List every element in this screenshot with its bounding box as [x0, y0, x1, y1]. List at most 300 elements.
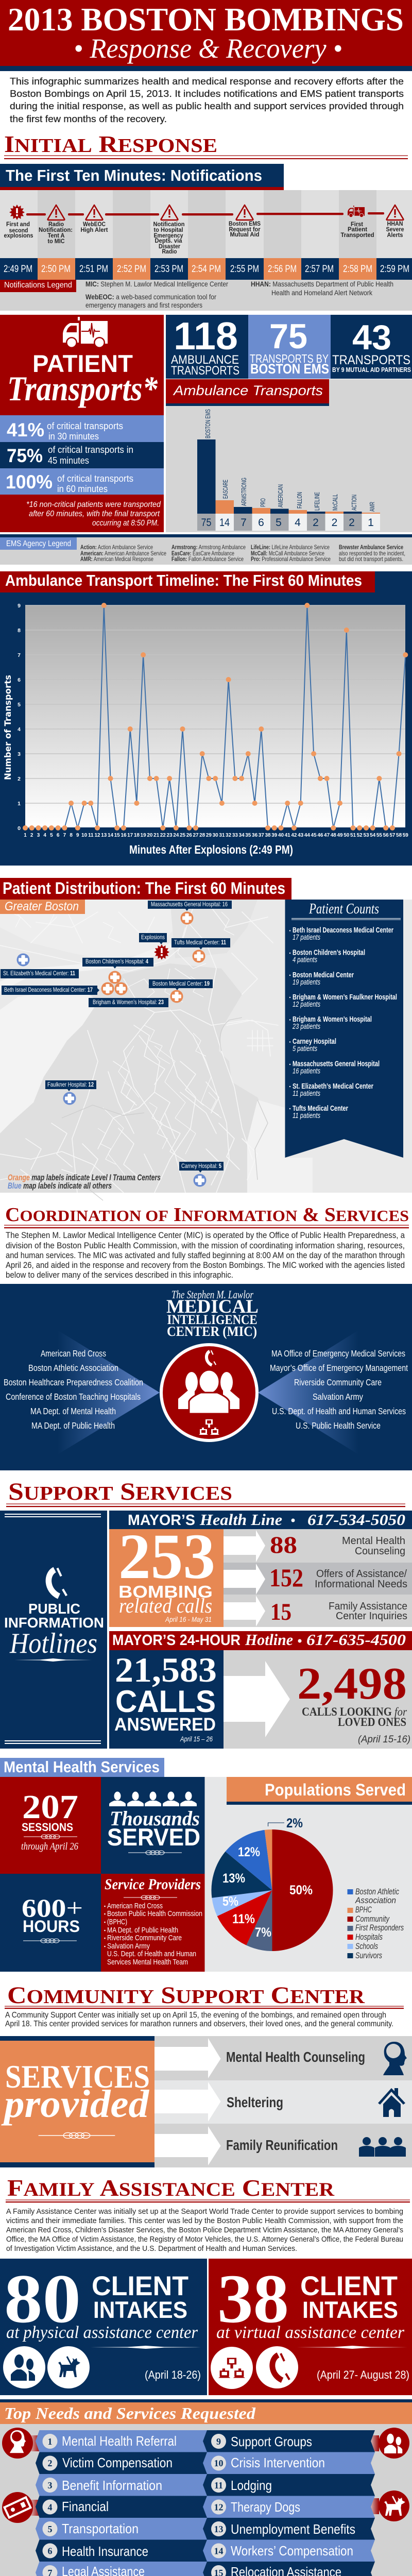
timeline event labels: Transported: [341, 232, 374, 239]
panel: service providers: Riverside Community Care: [107, 1934, 182, 1942]
left agencies list: Boston Healthcare Preparedness Coalition: [4, 1377, 143, 1387]
count: tufts: 11 patients: [293, 1112, 320, 1120]
bar labels: AMERICAN: [277, 484, 284, 507]
stat: 207 sessions: 207: [22, 1788, 78, 1826]
x axis labels: 42: [291, 833, 297, 838]
need 3: Benefit Information: [62, 2478, 162, 2493]
need 5: Transportation: [62, 2521, 139, 2536]
panel: physical assistance center: INTAKES: [93, 2297, 187, 2323]
count: carney: 5 patients: [293, 1045, 317, 1053]
x axis labels: 4: [43, 833, 46, 838]
pie legend: Survivors: [355, 1951, 382, 1960]
service: sheltering: [154, 2082, 405, 2122]
panel: ambulance transport timeline chart: [0, 571, 412, 866]
EMS agency legend: AMR: American Medical Response: [80, 555, 153, 563]
x axis labels: 19: [141, 833, 146, 838]
x axis labels: 23: [167, 833, 173, 838]
map marker: brigham and women's: Brigham & Women’s Hospital: 23: [93, 998, 164, 1006]
row: 15 family inquiries: Center Inquiries: [336, 1611, 407, 1622]
x axis labels: 26: [186, 833, 192, 838]
service: family reunification: Family Reunification: [226, 2137, 338, 2153]
hotline header: 617-635-4500: [306, 1631, 406, 1649]
timeline event labels: [4, 221, 404, 255]
x axis labels: 43: [298, 833, 304, 838]
EMS agency legend: Pro: Professional Ambulance Service: [251, 555, 331, 563]
subtitle: • Response & Recovery •: [74, 33, 342, 64]
stat: 43 mutual aid: 43: [352, 318, 391, 357]
left needs ribbon: [36, 2430, 207, 2576]
need 2: [36, 2452, 207, 2474]
need 11: 11: [214, 2480, 223, 2490]
need 1: 1: [47, 2436, 53, 2447]
stat: 75 percent: of critical transports in: [48, 445, 133, 455]
need 5: [36, 2518, 207, 2540]
need 14: Workers’ Compensation: [231, 2543, 353, 2558]
pie legend: [347, 1887, 404, 1960]
count: st elizabeth: St. Elizabeth’s Medical Center: [293, 1082, 373, 1091]
panel: transport totals: [166, 314, 412, 379]
stat: 253 bombing related calls: BOMBING: [118, 1582, 213, 1601]
need 2: 2: [47, 2458, 53, 2468]
x axis labels: [24, 833, 408, 838]
x axis labels: 46: [317, 833, 323, 838]
patient transports heading: PATIENT: [32, 350, 133, 377]
need 4: Financial: [62, 2499, 109, 2514]
icon: head: [2, 2428, 33, 2459]
stat: 75 boston ems: TRANSPORTS BY: [250, 352, 329, 365]
row: 88 counseling: Counseling: [355, 1546, 405, 1557]
intro text: [10, 76, 404, 124]
panel: service providers: Boston Public Health Commission: [107, 1909, 202, 1918]
map marker: faulkner: Faulkner Hospital: 12: [47, 1081, 94, 1088]
x axis labels: 7: [63, 833, 66, 838]
pie legend: Community: [355, 1914, 390, 1924]
panel: virtual assistance center: INTAKES: [302, 2297, 398, 2323]
panel: service providers: [101, 1874, 205, 1972]
stat: 253 bombing related calls: related calls: [119, 1594, 212, 1617]
stat: 100 percent: 100%: [6, 471, 53, 493]
y axis labels: 4: [18, 726, 21, 733]
count: boston children's: Boston Children’s Hospital: [293, 948, 365, 957]
x axis labels: 25: [180, 833, 185, 838]
stat: 21,583 calls answered: CALLS: [115, 1684, 216, 1719]
health line header: MAYOR’S: [128, 1512, 195, 1529]
count: tufts: [289, 1104, 348, 1120]
need 6: Health Insurance: [62, 2544, 148, 2559]
x axis labels: 48: [331, 833, 336, 838]
chart heading: Ambulance Transports: [173, 383, 323, 398]
title: 2013 BOSTON BOMBINGS: [8, 1, 404, 38]
bar labels: AMR: [368, 502, 376, 512]
x axis labels: 5: [50, 833, 53, 838]
x axis labels: 6: [57, 833, 60, 838]
bar values: [197, 514, 380, 531]
bar labels: McCALL: [331, 494, 339, 511]
map marker: beth israel: Beth Israel Deaconess Medical Center: 17: [4, 986, 93, 993]
left agencies list: Boston Athletic Association: [28, 1363, 118, 1373]
y axis labels: 7: [18, 652, 21, 658]
count: brigham: 23 patients: [292, 1023, 320, 1031]
stat: 207 sessions: through April 26: [21, 1841, 78, 1852]
needs heading: Top Needs and Services Requested: [4, 2404, 256, 2422]
x axis labels: 37: [259, 833, 264, 838]
bar labels: ARMSTRONG: [240, 478, 248, 506]
timeline event labels: Radio: [162, 249, 177, 255]
MIC heading: INTELLIGENCE: [167, 1312, 258, 1327]
need 4: [36, 2496, 207, 2518]
stat: 21,583 calls answered: 21,583: [115, 1650, 217, 1689]
bar values: 2: [332, 517, 337, 529]
count: boston medical center: [289, 971, 354, 987]
stat: 118 ambulance transports: 118: [174, 314, 238, 358]
EMS agency legend: Fallon: Fallon Ambulance Service: [171, 555, 244, 563]
x axis labels: 57: [389, 833, 396, 838]
EMS agency legend: Action: Action Ambulance Service: [80, 544, 153, 551]
map marker: massachusetts general: [148, 901, 232, 924]
timeline clock cells: 2:55 PM: [230, 264, 259, 275]
x axis labels: 53: [363, 833, 369, 838]
x axis labels: 28: [199, 833, 205, 838]
health line header: [128, 1511, 405, 1529]
notifications legend: [0, 280, 412, 311]
panel: services provided: SERVICES: [5, 2059, 150, 2095]
band heading: The First Ten Minutes: Notifications: [6, 166, 262, 184]
icon connectors: [31, 2435, 379, 2576]
stat: 100 percent: of critical transports: [57, 473, 133, 484]
pie chart: 13%: [222, 1871, 245, 1886]
arrow: family assistance: [224, 1596, 265, 1626]
stat: 253 bombing related calls: April 16 - May 31: [165, 1615, 212, 1623]
count: st elizabeth: [289, 1082, 373, 1098]
need 1: [36, 2430, 207, 2452]
timeline event labels: Notification:: [39, 227, 73, 233]
health line header: Health Line: [199, 1511, 282, 1529]
x axis labels: 33: [232, 833, 238, 838]
timeline event labels: Tent A: [47, 233, 65, 239]
pie legend: Schools: [355, 1941, 378, 1951]
timeline event labels: to MIC: [47, 239, 65, 245]
notifications legend: WebEOC: a web-based communication tool for: [85, 293, 216, 301]
x axis labels: 29: [206, 833, 212, 838]
x axis labels: 3: [37, 833, 40, 838]
row: 88 counseling: Mental Health: [342, 1535, 405, 1547]
right agencies list: Riverside Community Care: [294, 1377, 382, 1387]
section heading: family assistance center: FAMILY ASSISTANCE CENTER: [7, 2175, 335, 2201]
hotline header: [112, 1631, 406, 1649]
x axis labels: 38: [265, 833, 271, 838]
timeline clock cells: 2:52 PM: [117, 264, 146, 275]
left agencies list: Conference of Boston Teaching Hospitals: [6, 1392, 141, 1402]
title banner: [0, 0, 412, 71]
icon: people row: [109, 1792, 197, 1806]
map marker: boston children's: [82, 958, 153, 984]
footnote: after 60 minutes, with the final transport: [29, 510, 160, 518]
panel: service providers: Service Providers: [105, 1876, 201, 1893]
hotlines heading: INFORMATION: [4, 1615, 104, 1631]
plot area: [25, 605, 405, 828]
icon: money: [2, 2492, 33, 2523]
section heading: initial response: INITIAL RESPONSE: [4, 131, 217, 157]
panel: service providers: MA Dept. of Public Health: [107, 1926, 178, 1935]
call breakdown rows: [224, 1529, 412, 1627]
panel: top needs and services requested: [0, 2399, 412, 2576]
x axis labels: 21: [153, 833, 160, 838]
pie chart: 12%: [238, 1845, 260, 1859]
x axis labels: 45: [311, 833, 317, 838]
count: brigham: [289, 1015, 372, 1031]
x axis labels: 40: [278, 833, 284, 838]
row: 152 offers: Offers of Assistance/: [316, 1568, 407, 1580]
bar labels: EASCARE: [221, 480, 229, 499]
timeline clock cells: 2:49 PM: [4, 264, 32, 275]
map marker: massachusetts general: Massachusetts General Hospital: 16: [151, 901, 228, 908]
panel: service providers: American Red Cross: [107, 1902, 163, 1910]
stat: 43 mutual aid: [332, 318, 411, 374]
bars: [197, 439, 380, 514]
x axis labels: 24: [173, 833, 179, 838]
x axis labels: 47: [324, 833, 330, 838]
count: faulkner: [289, 993, 397, 1009]
stat: 100 percent: in 60 minutes: [57, 484, 108, 494]
panel: virtual assistance center: 38: [217, 2261, 289, 2337]
x axis title: Minutes After Explosions (2:49 PM): [129, 843, 293, 856]
section heading: community support center: COMMUNITY SUPPORT CENTER: [7, 1982, 365, 2009]
stat: 100 percent: [0, 468, 164, 495]
x axis labels: 13: [101, 833, 107, 838]
count: brigham: Brigham & Women’s Hospital: [293, 1015, 372, 1024]
count: beth israel: 17 patients: [293, 934, 320, 942]
count: tufts: Tufts Medical Center: [293, 1104, 348, 1113]
bar values: 75: [201, 517, 211, 529]
hotline header: Hotline: [245, 1631, 293, 1649]
x axis labels: 56: [383, 833, 389, 838]
panel: services provided: provided: [1, 2082, 149, 2126]
y axis labels: [18, 603, 21, 832]
family assistance paragraph: [6, 2207, 403, 2253]
bar labels: [204, 409, 376, 512]
timeline clock cells: [0, 258, 412, 280]
stat: 253 bombing related calls: 253: [118, 1521, 215, 1592]
left agencies list: [4, 1348, 143, 1431]
map marker: explosions: [139, 933, 169, 960]
panel: patient counts: [285, 900, 403, 1158]
timeline event labels: Patient: [348, 227, 367, 233]
need 10: 10: [214, 2458, 224, 2468]
x axis labels: 52: [357, 833, 363, 838]
stat: thousands served: Thousands: [110, 1807, 200, 1830]
family assistance paragraph: A Family Assistance Center was initially set up at the Seaport World Trade Center to provide support services to bombing: [6, 2207, 403, 2216]
bar values: 14: [219, 517, 230, 529]
panel: mayor's health line: [109, 1511, 412, 1627]
panel: ambulance transports bar chart: [166, 379, 412, 532]
timeline clock cells: 2:54 PM: [192, 264, 221, 275]
map marker: explosions: Explosions: [141, 934, 165, 941]
right needs ribbon: [203, 2430, 375, 2576]
section heading: coordination: COORDINATION OF INFORMATION & SERVICES: [5, 1204, 409, 1226]
row: 152 offers: Informational Needs: [315, 1579, 407, 1590]
need 7: [36, 2562, 207, 2576]
need 1: Mental Health Referral: [62, 2433, 177, 2449]
panel: physical assistance center: at physical assistance center: [6, 2323, 198, 2342]
stat: 75 percent: [0, 442, 164, 468]
intro text: the first few months of the recovery.: [10, 113, 167, 124]
x axis labels: 12: [94, 833, 100, 838]
x axis labels: 18: [134, 833, 140, 838]
panel: virtual assistance center: CLIENT: [300, 2271, 398, 2301]
chart heading: Ambulance Transport Timeline: The First 60 Minutes: [5, 571, 362, 589]
intro text: This infographic summarizes health and medical response and recovery efforts after the: [10, 76, 404, 87]
notifications timeline panel: [0, 164, 412, 280]
stat: 21,583 calls answered: ANSWERED: [114, 1715, 216, 1735]
bar labels: LIFELINE: [313, 492, 321, 511]
map marker: beth israel: [2, 982, 114, 995]
bar values: 2: [313, 517, 319, 529]
icon: MIC emblem: [160, 1343, 259, 1442]
arrow: mental health: [224, 1530, 265, 1562]
y axis labels: 9: [18, 603, 21, 609]
stat: 2,498 calls looking for loved ones: 2,498: [297, 1659, 407, 1709]
timeline event labels: Notification: [153, 222, 184, 228]
footnote: [0, 495, 164, 532]
need 13: [203, 2518, 375, 2540]
timeline event labels: High Alert: [80, 227, 108, 233]
stat: thousands served: SERVED: [107, 1823, 200, 1851]
x axis labels: 22: [160, 833, 166, 838]
y axis labels: 0: [18, 825, 21, 832]
need 14: [203, 2540, 375, 2562]
timeline event labels: Boston EMS: [229, 221, 261, 227]
pie legend: Boston Athletic: [355, 1887, 399, 1896]
count: mass general: 16 patients: [293, 1067, 320, 1076]
panel: service providers: Salvation Army: [107, 1942, 150, 1951]
timeline event labels: WebEOC: [83, 222, 106, 228]
timeline event labels: Radio: [48, 222, 64, 228]
map marker: brigham and women's: [89, 982, 168, 1007]
service: mental health counseling: [154, 2038, 407, 2078]
x axis labels: 14: [108, 833, 113, 838]
x axis labels: 34: [239, 833, 245, 838]
count: boston children's: [289, 948, 365, 964]
timeline clock cells: 2:51 PM: [79, 264, 108, 275]
notifications legend: MIC: Stephen M. Lawlor Medical Intelligence Center: [85, 280, 228, 288]
need 11: Lodging: [231, 2478, 272, 2493]
x axis labels: 11: [88, 833, 94, 838]
stat: 2,498 calls looking for loved ones: [224, 1650, 412, 1749]
service: family reunification: [154, 2126, 406, 2165]
map legend: Blue map labels indicate all others: [8, 1181, 112, 1191]
x axis labels: 36: [252, 833, 258, 838]
row: 88 counseling: [270, 1532, 405, 1558]
family assistance paragraph: victims and their immediate families. This center was led by the Boston Public Health Commission, with support from the: [6, 2216, 403, 2225]
coordination paragraph: [6, 1231, 405, 1280]
heading: patient distribution: Patient Distribution: The First 60 Minutes: [3, 879, 285, 897]
row: 15 family inquiries: Family Assistance: [329, 1601, 407, 1612]
panel: service providers: U.S. Dept. of Health and Human: [107, 1950, 196, 1958]
stat: 118 ambulance transports: TRANSPORTS: [171, 364, 239, 378]
pie legend: Hospitals: [355, 1932, 383, 1942]
need 9: 9: [216, 2436, 221, 2447]
right agencies list: U.S. Public Health Service: [296, 1420, 381, 1431]
row: 152 offers: 152: [269, 1563, 303, 1592]
timeline event labels: Severe: [386, 227, 404, 233]
stat: 600+ hours: HOURS: [23, 1917, 80, 1936]
count: boston medical center: 19 patients: [293, 978, 320, 987]
bar labels: ACTION: [350, 495, 358, 511]
timeline event labels: Disaster: [159, 244, 180, 250]
service: mental health counseling: Mental Health Counseling: [226, 2049, 365, 2065]
icon: dog: [379, 2490, 409, 2521]
grid lines: [25, 605, 405, 803]
count: boston medical center: Boston Medical Center: [293, 971, 354, 979]
MIC heading: CENTER (MIC): [167, 1324, 257, 1339]
pie legend: BPHC: [355, 1905, 372, 1914]
stat: 75 boston ems: BOSTON EMS: [250, 361, 329, 377]
panel: virtual assistance center: at virtual assistance center: [216, 2323, 405, 2342]
need 4: 4: [47, 2502, 53, 2512]
icon: therapy dog: [47, 2346, 90, 2388]
panel: virtual assistance center: [209, 2259, 412, 2395]
count: mass general: Massachusetts General Hospital: [293, 1059, 380, 1069]
notifications legend: Notifications Legend: [4, 281, 72, 290]
timeline columns: [0, 190, 412, 258]
stat: 75 boston ems: 75: [269, 317, 307, 356]
hotlines heading: Hotlines: [9, 1628, 97, 1659]
timeline clock cells: 2:58 PM: [343, 264, 372, 275]
need 9: Support Groups: [231, 2434, 312, 2449]
stat: thousands served: [101, 1777, 205, 1874]
stat: 253 bombing related calls: [109, 1521, 224, 1627]
x axis labels: 55: [376, 833, 382, 838]
bar values: 1: [368, 517, 374, 529]
x axis labels: 35: [245, 833, 251, 838]
section heading: support services: SUPPORT SERVICES: [8, 1478, 232, 1505]
stat: 75 boston ems: [250, 317, 329, 377]
y axis labels: 8: [18, 628, 21, 634]
need 6: 6: [47, 2546, 53, 2556]
y axis labels: 3: [18, 751, 21, 757]
icon: two people: [3, 2346, 45, 2388]
hotline header: MAYOR’S 24-HOUR: [112, 1632, 241, 1649]
need 3: 3: [47, 2480, 53, 2490]
map marker: boston medical center: Boston Medical Center: 19: [152, 980, 210, 987]
MIC heading: MEDICAL: [166, 1296, 259, 1317]
bar values: 2: [349, 517, 355, 529]
x axis labels: 15: [114, 833, 120, 838]
EMS agency legend: LifeLine: LifeLine Ambulance Service: [251, 544, 330, 551]
family assistance paragraph: of Investigation Victim Assistance, and the U.S. Department of Health and Human Services.: [6, 2244, 297, 2253]
timeline event labels: to Hospital: [153, 227, 183, 233]
EMS agency legend: American: American Ambulance Service: [80, 550, 166, 557]
count: carney: Carney Hospital: [293, 1037, 336, 1046]
x axis labels: 44: [304, 833, 310, 838]
map marker: boston medical center: [149, 979, 213, 1003]
pie chart: 11%: [232, 1912, 255, 1926]
count: boston children's: 4 patients: [293, 956, 317, 964]
left agencies list: MA Dept. of Public Health: [31, 1420, 115, 1431]
footnote: occurring at 8:50 PM.: [92, 519, 159, 528]
x axis labels: 30: [213, 833, 218, 838]
x axis labels: 41: [285, 833, 290, 838]
y axis labels: 6: [18, 677, 21, 683]
need 12: Therapy Dogs: [231, 2499, 300, 2515]
community support paragraph: [5, 2011, 393, 2028]
stat: 75 percent: 75%: [7, 445, 43, 466]
need 13: 13: [214, 2524, 224, 2534]
need 5: 5: [47, 2524, 53, 2534]
timeline event labels: First: [351, 222, 363, 228]
left agencies list: MA Dept. of Mental Health: [30, 1406, 116, 1416]
y axis labels: 1: [18, 801, 21, 807]
